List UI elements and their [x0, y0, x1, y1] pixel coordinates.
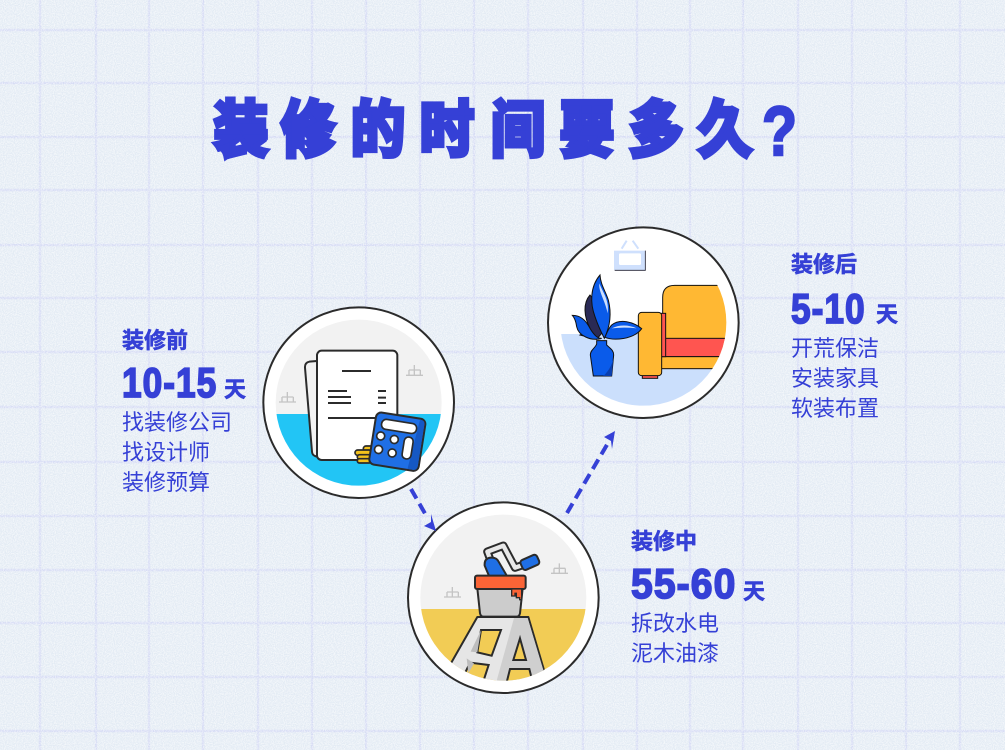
text block: before renovation	[122, 328, 246, 495]
icon: ladder	[450, 616, 545, 681]
title: ?	[762, 92, 797, 170]
duration number: 5-10	[791, 286, 866, 333]
duration number: 10-15	[122, 360, 217, 407]
text block: after renovation	[791, 252, 898, 421]
text block: during renovation: 拆改水电	[631, 611, 719, 636]
icon: sofa	[638, 284, 726, 379]
text block: during renovation	[631, 529, 765, 666]
text block: before renovation: 装修前	[122, 328, 188, 353]
text block: after renovation: 天	[876, 302, 898, 327]
text block: during renovation: 装修中	[631, 529, 697, 554]
panel: before renovation illustration	[263, 307, 454, 498]
duration number: 55-60	[631, 560, 736, 607]
text block: before renovation: 找装修公司	[122, 410, 232, 435]
text block: after renovation: 开荒保洁	[791, 336, 879, 361]
text block: before renovation: 找设计师	[122, 440, 210, 465]
icon: paint roller	[485, 546, 540, 577]
text block: during renovation: 天	[743, 579, 765, 604]
panel: during renovation illustration	[408, 502, 599, 693]
icon: shopping bag picture	[614, 241, 645, 270]
arrow: during to after	[567, 431, 615, 513]
arrow: before to during	[411, 489, 436, 531]
text block: after renovation: 装修后	[791, 252, 857, 277]
text block: during renovation: 泥木油漆	[631, 641, 719, 666]
icon: coins	[355, 446, 377, 463]
text block: before renovation: 天	[224, 377, 246, 402]
text block: after renovation: 软装布置	[791, 396, 879, 421]
icon: potted plant	[572, 275, 642, 376]
title: 装修的时间要多久	[214, 97, 752, 165]
icon: documents	[305, 351, 397, 460]
icon: calculator	[369, 412, 426, 472]
text block: before renovation: 装修预算	[122, 470, 210, 495]
text block: after renovation: 安装家具	[791, 366, 879, 391]
icon: paint bucket	[475, 576, 526, 617]
panel: after renovation illustration	[548, 227, 740, 418]
